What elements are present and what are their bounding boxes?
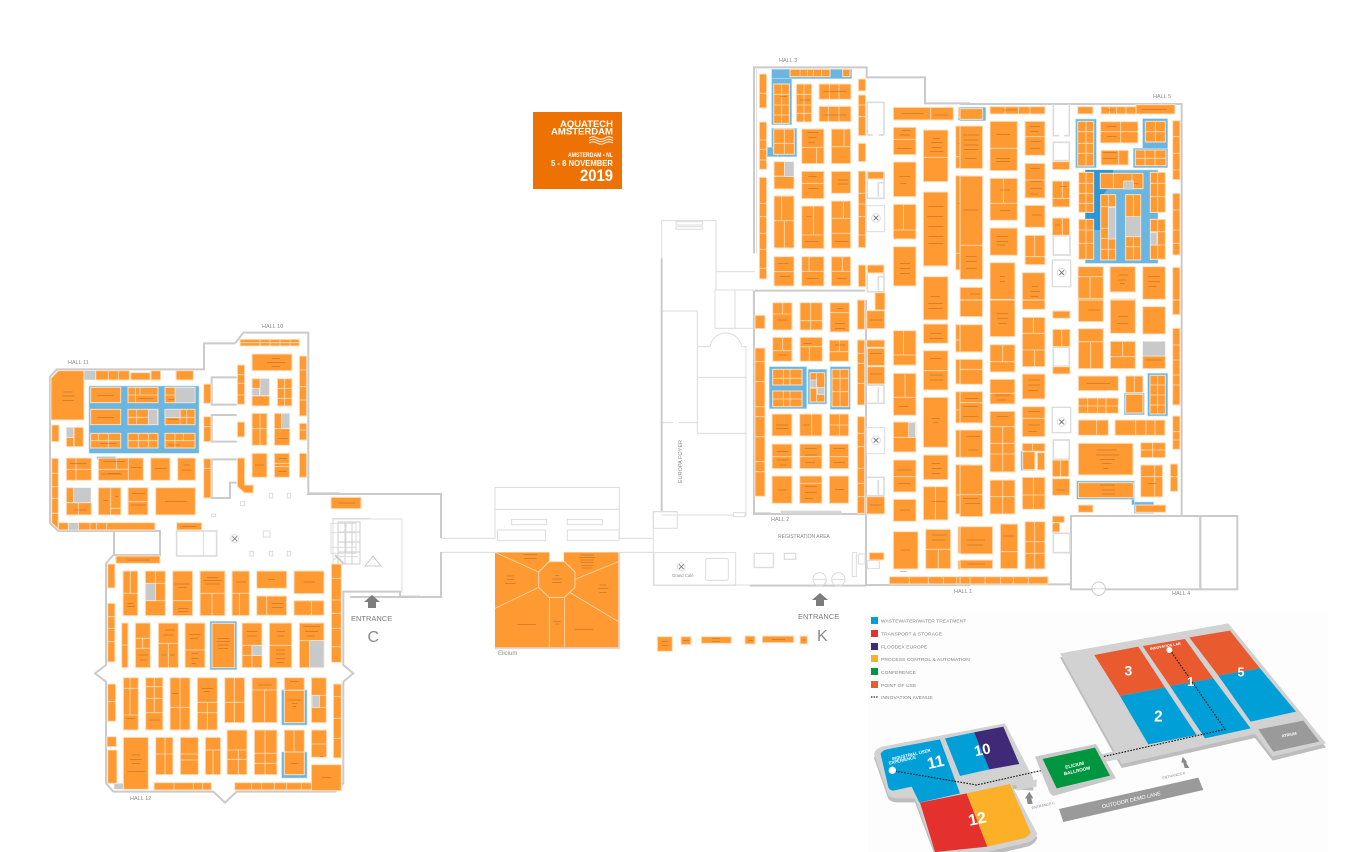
overview: outdoor demo lane (1059, 778, 1203, 822)
entrance C: ENTRANCE (351, 614, 392, 623)
hall and area labels: HALL 1 (954, 589, 972, 595)
hall 1 grey stand (1143, 341, 1165, 356)
overview: halls 10 11 12: INDUSTRIAL USER (892, 747, 932, 761)
entrance K (798, 593, 839, 645)
hall and area labels: HALL 2 (771, 517, 789, 523)
hall and area labels: HALL 5 (1153, 94, 1171, 100)
isometric overview map (874, 623, 1326, 852)
overview: hall numbers: 5 (1237, 666, 1245, 680)
logo: Aquatech Amsterdam: AQUATECH (560, 119, 613, 129)
legend: INNOVATION AVENUE (881, 695, 933, 701)
hall 5 grey stands (1108, 181, 1157, 245)
overview: hall numbers (1124, 642, 1298, 738)
entrance K: K (817, 628, 828, 645)
service core hall 5 (1052, 260, 1071, 287)
hall 5 stands (960, 105, 1180, 310)
hall and area labels: Elicium (498, 651, 517, 657)
entrance C (351, 595, 392, 646)
legend: TRANSPORT & STORAGE (881, 632, 943, 638)
hall 5 blue zones (960, 107, 1168, 263)
hall 11 blue zone (89, 386, 199, 453)
hall 2 stands (755, 300, 970, 584)
overview: entrance markers: ENTRANCE C (1031, 801, 1056, 810)
overview: innovation avenue dotted path (889, 647, 1225, 785)
row of stands below Elicium (657, 636, 807, 651)
hall 3 grey stand (785, 162, 794, 176)
legend (871, 617, 970, 701)
overview: hall numbers: 3 (1124, 662, 1132, 678)
hall 2 grey stands (810, 380, 915, 437)
overview: Elicium ballroom (1017, 744, 1116, 796)
hall 12 stands (107, 556, 341, 791)
service core hall 1 (1052, 407, 1071, 433)
overview: halls 10 11 12 (874, 723, 1037, 852)
logo: Aquatech Amsterdam (533, 112, 622, 189)
hall and area labels (68, 58, 1190, 802)
hall 10 and 11 stands (51, 339, 361, 560)
panel: hall 2 south (750, 300, 970, 586)
hall 2 blue zones (769, 367, 850, 409)
hall 1 blue zones (1021, 373, 1168, 513)
logo: Aquatech Amsterdam: 2019 (580, 166, 613, 185)
entrance K: ENTRANCE (798, 612, 839, 621)
panel: Elicium (495, 552, 619, 648)
legend: WASTEWATER/WATER TREATMENT (881, 618, 966, 624)
overview: halls 1 to 5 base (1060, 623, 1326, 768)
overview: halls 10 11 12: 12 (967, 809, 988, 830)
hall and area labels: HALL 12 (130, 796, 151, 802)
hall 3 blue zones (767, 69, 970, 157)
service cores hall 3 (867, 102, 885, 292)
panel: corridor and foyer structure (307, 221, 840, 597)
hall and area labels: HALL 4 (1172, 591, 1190, 597)
escalators and service icons (212, 493, 370, 560)
panel: legend and isometric overview background (868, 612, 1328, 852)
overview: hall numbers: ATRIUM (1281, 731, 1298, 738)
registration area fixtures (754, 553, 879, 586)
panel: halls 10 and 11 (50, 333, 370, 560)
overview: entrance markers (1025, 757, 1189, 810)
hall 1 stands (960, 300, 1180, 584)
hall and area labels: Grand Café (672, 573, 694, 578)
overview: outdoor demo lane: OUTDOOR DEMO LANE (1101, 791, 1162, 810)
hall and area labels: HALL 11 (68, 360, 89, 366)
overview: Elicium ballroom: BALLROOM (1063, 765, 1091, 776)
hall 12 grey stands (114, 583, 324, 789)
unassigned grey stands (66, 371, 290, 530)
overview: halls 10 11 12: 10 (973, 741, 992, 760)
overview: hall numbers: 1 (1187, 675, 1194, 689)
hall and area labels: REGISTRATION AREA (778, 534, 831, 540)
legend: CONFERENCE (881, 670, 917, 676)
hall and area labels: HALL 3 (779, 58, 797, 64)
logo: Aquatech Amsterdam: AMSTERDAM • NL (568, 152, 613, 159)
overview: entrance markers: ENTRANCE K (1162, 771, 1186, 780)
overview: hall numbers: 2 (1154, 708, 1163, 725)
panel: hall 1 and hall 5 south (960, 300, 1237, 595)
logo: Aquatech Amsterdam: AMSTERDAM (551, 126, 613, 136)
overview: halls 10 11 12: 11 (926, 753, 946, 773)
hall and area labels: HALL 10 (262, 324, 283, 330)
legend: PROCESS CONTROL & AUTOMATION (881, 657, 970, 663)
entrance C: C (368, 629, 379, 646)
overview: hall numbers: INNOVATION LAB (1150, 642, 1181, 651)
panel: hall 3 and hall 2 north (754, 67, 970, 320)
legend: FLOODEX EUROPE (881, 644, 928, 650)
service cores hall 2 (867, 385, 885, 496)
panel: hall 12 (95, 555, 420, 803)
hall and area labels: EUROPA FOYER (678, 440, 684, 483)
overview: halls 10 11 12: EXPERIENCE (888, 755, 917, 766)
overview: Elicium ballroom: ELICIUM (1065, 761, 1085, 770)
panel: hall 5 north (960, 104, 1182, 310)
hall 12 blue zones (210, 621, 307, 778)
hall 3 stands (759, 69, 970, 320)
legend: POINT OF USE (881, 683, 917, 689)
logo: Aquatech Amsterdam: 5 - 8 NOVEMBER (551, 158, 613, 168)
